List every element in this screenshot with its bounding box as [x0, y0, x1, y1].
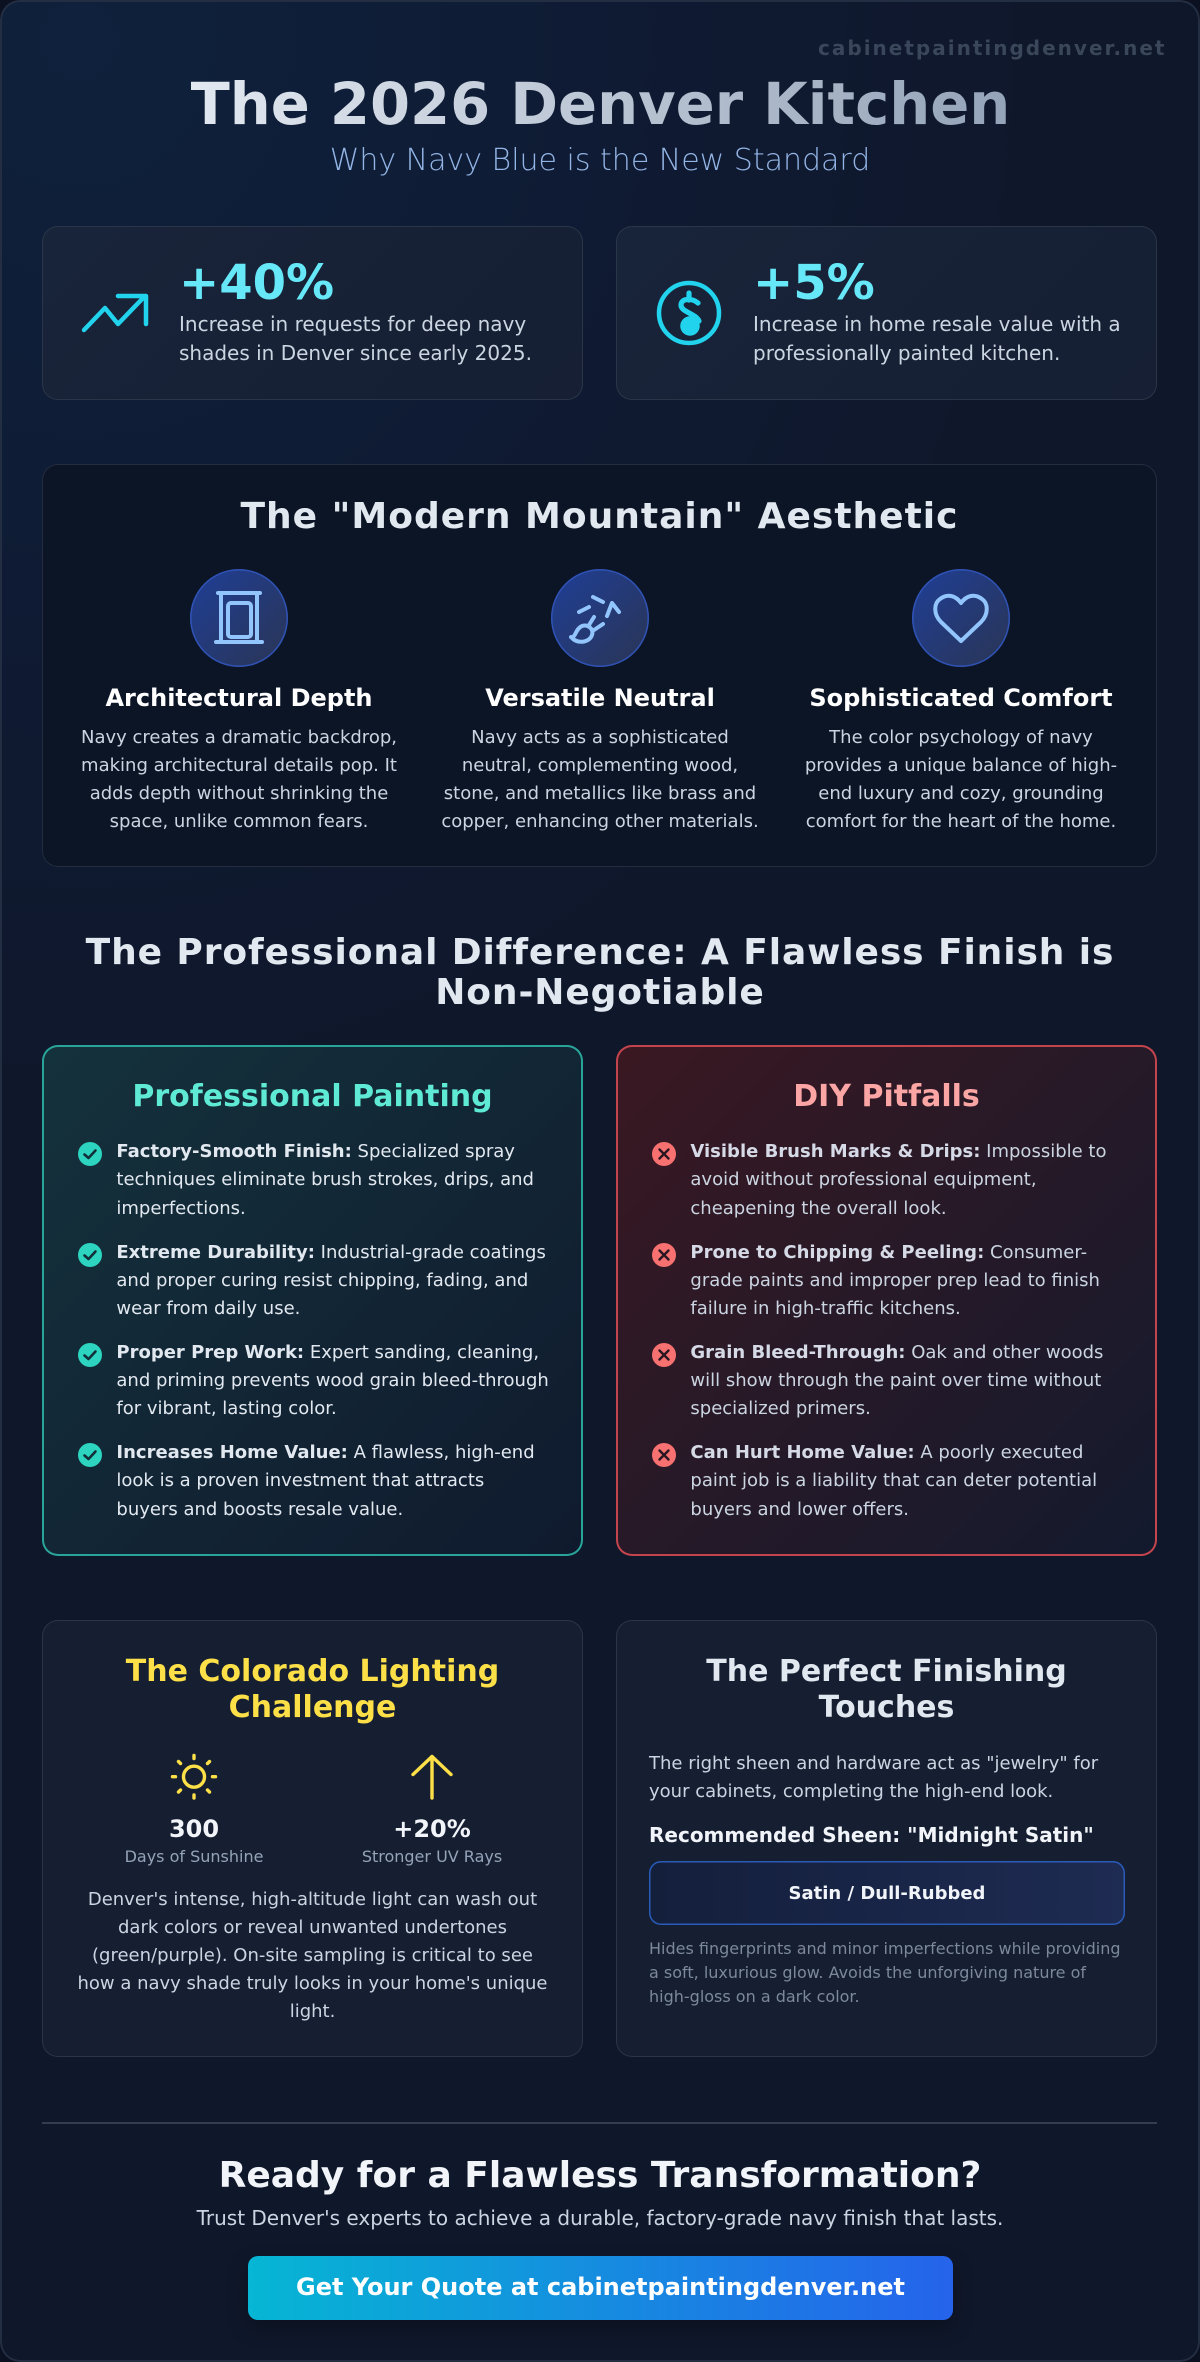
icon: architectural column	[190, 569, 288, 667]
panel: professional painting	[42, 1045, 583, 1556]
feature title: architectural depth: Architectural Depth	[105, 684, 373, 712]
item: grain bleed	[652, 1342, 1103, 1419]
item text: Grain Bleed-Through: Oak and other woods will show through the paint over time without specialized primers.	[690, 1342, 1103, 1419]
stat: 300 days: 300	[169, 1814, 219, 1842]
CTA text: Trust Denver's experts to achieve a durable, factory-grade navy finish that lasts.	[197, 2206, 1003, 2230]
stat: 20 percent: +20%	[393, 1814, 471, 1842]
heading: DIY Pitfalls	[793, 1078, 980, 1114]
item text: Extreme Durability: Industrial-grade coatings and proper curing resist chipping, fading, and wear from daily use.	[116, 1242, 546, 1319]
icon: up arrow	[400, 1745, 464, 1809]
icon: check	[78, 1343, 102, 1367]
feature text: versatile neutral: Navy acts as a sophisticated neutral, complementing wood, stone, and metallics like brass and copper, enhancing other materials.	[441, 726, 759, 832]
button label: Get Your Quote at cabinetpaintingdenver.net	[296, 2273, 905, 2301]
feature text: architectural depth: Navy creates a dramatic backdrop, making architectural details pop. It adds depth without shrinking the space, unlike common fears.	[81, 726, 397, 832]
feature title: sophisticated comfort: Sophisticated Comfort	[809, 684, 1113, 712]
item: home value	[78, 1442, 535, 1520]
CTA heading: Ready for a Flawless Transformation?	[219, 2155, 981, 2196]
icon: check	[78, 1443, 102, 1467]
stat description: Increase in requests for deep navy shades in Denver since early 2025.	[179, 312, 532, 365]
panel: stat 5 percent	[616, 226, 1157, 400]
item: chipping	[652, 1242, 1100, 1319]
subtitle: Why Navy Blue is the New Standard	[330, 143, 870, 178]
icon: paint brush	[551, 569, 649, 667]
stat description: Increase in home resale value with a professionally painted kitchen.	[753, 312, 1121, 365]
icon: sun	[170, 1754, 218, 1800]
item: factory smooth	[78, 1141, 534, 1219]
icon: x mark	[652, 1243, 676, 1267]
stat label: Days of Sunshine	[125, 1847, 263, 1866]
recommendation label: Recommended Sheen: "Midnight Satin"	[649, 1823, 1094, 1847]
item: extreme durability	[78, 1242, 546, 1319]
item: brush marks	[652, 1141, 1106, 1219]
icon: trending up arrow	[82, 294, 148, 332]
heading: The "Modern Mountain" Aesthetic	[240, 496, 958, 537]
panel: perfect finishing touches	[616, 1620, 1157, 2057]
section heading: professional difference: The Professional Difference: A Flawless Finish is Non-Negotiable	[86, 932, 1114, 1013]
icon: heart	[912, 569, 1010, 667]
watermark: cabinetpaintingdenver.net	[818, 36, 1166, 60]
item text: Proper Prep Work: Expert sanding, cleaning, and priming prevents wood grain bleed-through for vibrant, lasting color.	[116, 1342, 549, 1419]
heading: The Perfect Finishing Touches	[706, 1654, 1067, 1724]
item: hurts value	[652, 1442, 1097, 1520]
item text: Factory-Smooth Finish: Specialized spray techniques eliminate brush strokes, drips, and imperfections.	[116, 1141, 534, 1219]
paragraph: The right sheen and hardware act as "jewelry" for your cabinets, completing the high-end look.	[649, 1753, 1098, 1802]
CTA button	[248, 2256, 953, 2320]
item text: Can Hurt Home Value: A poorly executed paint job is a liability that can deter potential buyers and lower offers.	[690, 1442, 1097, 1520]
stat label: Stronger UV Rays	[362, 1847, 502, 1866]
item text: Prone to Chipping & Peeling: Consumer- grade paints and improper prep lead to finish failure in high-traffic kitchens.	[690, 1242, 1100, 1319]
stat number: +5%	[753, 255, 875, 311]
panel: stat 40 percent	[42, 226, 583, 400]
panel: modern mountain aesthetic	[42, 464, 1157, 867]
call to action	[0, 2150, 1200, 2325]
icon: x mark	[652, 1443, 676, 1467]
item: proper prep	[78, 1342, 549, 1419]
note: Hides fingerprints and minor imperfections while providing a soft, luxurious glow. Avoids the unforgiving nature of high-gloss on a dark color.	[649, 1938, 1121, 2006]
stat number: +40%	[179, 255, 334, 311]
icon: x mark	[652, 1343, 676, 1367]
swatch label: Satin / Dull-Rubbed	[789, 1882, 985, 1904]
sheen swatch	[649, 1860, 1125, 1925]
item text: Increases Home Value: A flawless, high-end look is a proven investment that attracts buyers and boosts resale value.	[116, 1442, 535, 1520]
icon: check	[78, 1243, 102, 1267]
icon: dollar coin	[656, 280, 722, 346]
panel: DIY pitfalls	[616, 1045, 1157, 1556]
icon: x mark	[652, 1142, 676, 1166]
heading: Professional Painting	[132, 1078, 493, 1114]
heading: The Colorado Lighting Challenge	[126, 1654, 499, 1724]
feature text: sophisticated comfort: The color psychology of navy provides a unique balance of high- end luxury and cozy, grounding comfort for the heart of the home.	[805, 726, 1117, 832]
icon: check	[78, 1142, 102, 1166]
title: The 2026 Denver Kitchen	[190, 71, 1010, 138]
feature title: versatile neutral: Versatile Neutral	[485, 684, 715, 712]
panel: Colorado lighting challenge	[42, 1620, 583, 2057]
item text: Visible Brush Marks & Drips: Impossible to avoid without professional equipment, cheapening the overall look.	[690, 1141, 1106, 1219]
footer rule	[42, 2122, 1157, 2124]
paragraph: Denver's intense, high-altitude light can wash out dark colors or reveal unwanted undertones (green/purple). On-site sampling is critical to see how a navy shade truly looks in your home's unique light.	[77, 1889, 548, 2022]
